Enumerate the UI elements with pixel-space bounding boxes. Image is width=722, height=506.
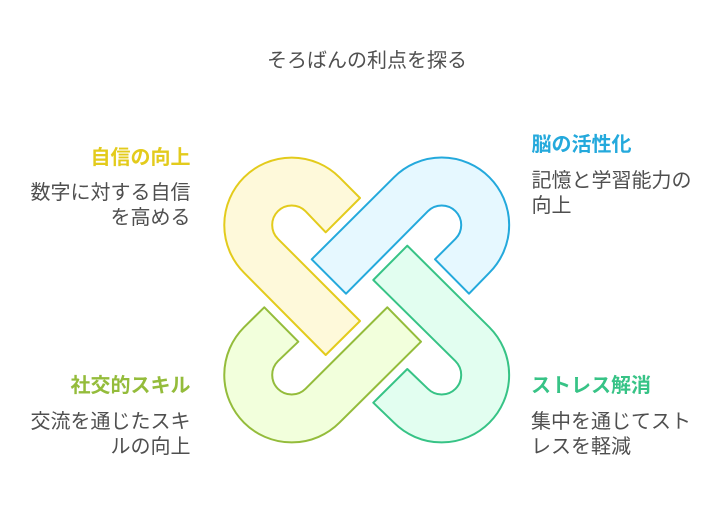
heading: 自信の向上: 自信の向上: [90, 146, 190, 169]
link: blue: [312, 158, 509, 294]
text block: ストレス解消: [531, 410, 691, 458]
text block: ストレス解消: 集中を通じてスト: [531, 410, 691, 433]
link: lime: [224, 307, 421, 442]
heading: 脳の活性化: 脳の活性化: [532, 133, 632, 156]
text block: 社交的スキル: ルの向上: [110, 435, 190, 458]
text block: 自信の向上: を高める: [110, 206, 190, 229]
text block: 脳の活性化: [532, 169, 692, 217]
text block: 自信の向上: [30, 181, 190, 229]
text block: 自信の向上: 数字に対する自信: [30, 181, 190, 204]
text block: 脳の活性化: 記憶と学習能力の: [532, 169, 692, 192]
title: そろばんの利点を探る: [267, 49, 467, 72]
link: green: [373, 246, 509, 442]
text block: 社交的スキル: 交流を通じたスキ: [30, 410, 190, 433]
text block: 脳の活性化: 向上: [532, 194, 572, 217]
text block: 社交的スキル: [30, 410, 190, 458]
heading: ストレス解消: ストレス解消: [531, 374, 651, 397]
heading: 社交的スキル: 社交的スキル: [70, 374, 190, 397]
text block: ストレス解消: レスを軽減: [531, 435, 631, 458]
link: yellow: [224, 158, 360, 355]
